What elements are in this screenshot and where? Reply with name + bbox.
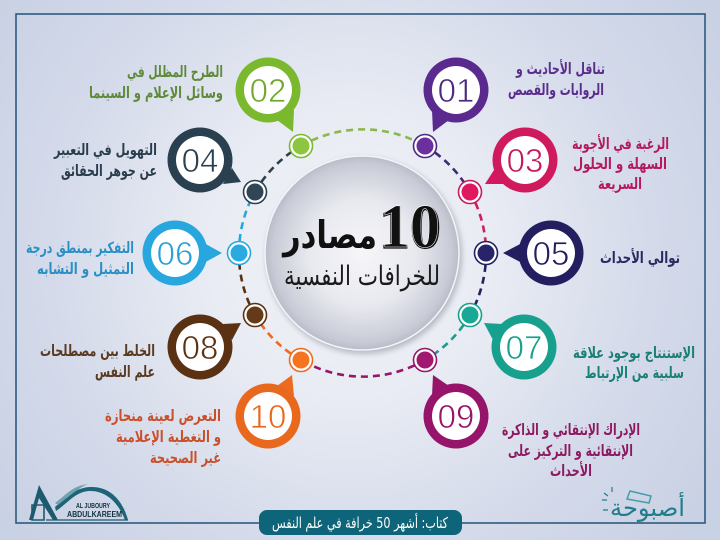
logo: Osbouha: أصبوحة (610, 492, 685, 522)
text 07: سلبية من الإرتباط (585, 364, 684, 382)
text 06: التمثيل و التشابه (37, 260, 134, 278)
text 07 (573, 344, 695, 382)
node 07 (458, 304, 482, 326)
text 03: السريعة (598, 175, 642, 193)
text 04: التهويل في التعبير (53, 141, 157, 160)
bubble 07: 07 (506, 329, 542, 366)
item 01 (414, 58, 605, 158)
bubble 10 (236, 375, 300, 448)
text 01 (508, 59, 605, 99)
logo: Al Juboury Abdulkareem (29, 484, 128, 520)
dashed ring connecting the nodes (239, 129, 486, 377)
text 01: الروايات والقصص (508, 81, 604, 99)
item 08 (40, 304, 266, 381)
text 03 (572, 134, 669, 193)
title number 10: 10 (380, 193, 440, 261)
bubble 06: 06 (157, 235, 193, 272)
bubble 02: 02 (250, 72, 286, 109)
bubble 05 (503, 220, 584, 286)
text 09: الإدراك الإنتقائي و الذاكرة (502, 421, 640, 440)
bubble 09 (424, 375, 488, 448)
text 08: الخلط بين مصطلحات (40, 342, 155, 360)
bubble 03 (485, 128, 558, 192)
text 09: الإنتقائية و التركيز على (508, 442, 633, 460)
bubble 04 (168, 128, 241, 192)
text 02: الطرح المظلل في (127, 63, 223, 82)
text 10: و التغطية الإعلامية (116, 428, 221, 446)
item 05 (474, 220, 680, 286)
item 03 (458, 128, 669, 204)
text 05: توالي الأحداث (600, 248, 680, 268)
title number 10: 10 (379, 194, 441, 262)
text 10: غير الصحيحة (150, 449, 221, 467)
text 06 (26, 239, 134, 278)
text 08: علم النفس (95, 363, 155, 381)
bubble 05: 05 (533, 235, 569, 272)
node 04 (244, 180, 266, 204)
subtitle: للخرافات النفسية (284, 261, 440, 292)
source pill (259, 510, 462, 535)
bubble 07 (484, 314, 556, 380)
item 02 (89, 58, 312, 158)
text 10 (105, 407, 221, 467)
text 09: الأحداث (550, 461, 592, 480)
item 09 (414, 348, 640, 480)
bubble 02 (236, 58, 300, 132)
central disc with title (265, 156, 462, 354)
bubble 10: 10 (250, 398, 286, 435)
text 02 (89, 63, 223, 102)
bubble 03: 03 (507, 142, 543, 179)
item 07 (458, 304, 695, 382)
logo: Al Juboury Abdulkareem: ABDULKAREEM (67, 510, 122, 519)
bubble 09: 09 (438, 398, 474, 435)
node 09 (414, 348, 436, 372)
node 08 (244, 304, 266, 326)
text 02: وسائل الإعلام و السينما (89, 84, 223, 102)
node 05 (474, 242, 498, 264)
bubble 08 (168, 314, 241, 380)
bubble 06 (142, 220, 222, 286)
node 03 (458, 180, 482, 204)
node 01 (414, 134, 436, 158)
text 03: السهلة و الحلول (573, 155, 667, 173)
text 06: التفكير بمنطق درجة (26, 239, 134, 257)
bubble 01 (424, 58, 488, 132)
text 04 (53, 141, 157, 180)
node 02 (290, 134, 312, 158)
logo: Al Juboury Abdulkareem: AL JUBOURY (76, 503, 110, 510)
bubble 01: 01 (438, 72, 474, 109)
text 01: تناقل الأحاديث و (515, 59, 605, 78)
bubble 04: 04 (182, 142, 218, 179)
text 10: التعرض لعينة منحازة (105, 407, 221, 425)
node 06 (228, 242, 250, 264)
node 10 (290, 348, 312, 372)
text 09 (502, 421, 640, 480)
item 10 (105, 348, 312, 467)
title word: مصادر (281, 213, 377, 257)
source pill: كتاب: أشهر 50 خرافة في علم النفس (272, 513, 449, 533)
text 04: عن جوهر الحقائق (61, 162, 157, 180)
item 04 (53, 128, 267, 204)
text 03: الرغبة في الأجوبة (572, 134, 669, 154)
text 08 (40, 342, 155, 381)
bubble 08: 08 (182, 329, 218, 366)
item 06 (26, 220, 250, 286)
